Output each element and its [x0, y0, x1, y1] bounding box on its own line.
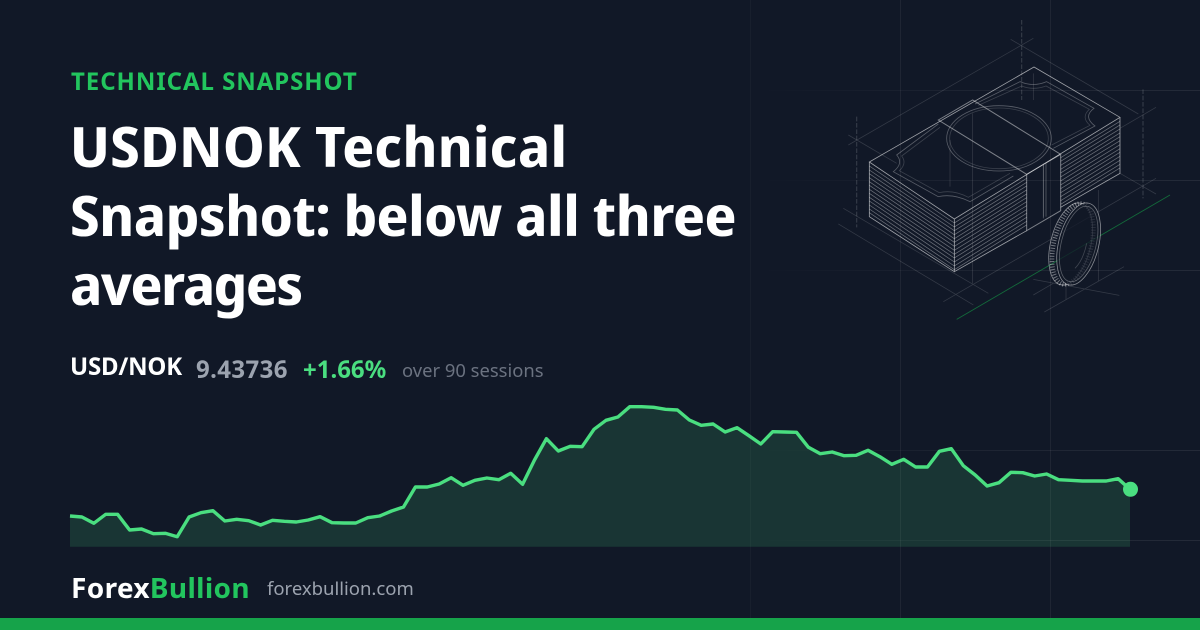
eyebrow label: TECHNICAL SNAPSHOT	[71, 65, 358, 98]
brand logo: ForexBullion	[71, 569, 250, 607]
period note: over 90 sessions	[402, 358, 544, 383]
price: 9.43736	[196, 353, 288, 386]
chart line	[70, 407, 1130, 537]
site url: forexbullion.com	[267, 576, 414, 601]
title: USDNOK Technical	[70, 108, 567, 184]
title	[70, 108, 736, 322]
latest value marker	[1123, 482, 1138, 497]
bottom accent bar	[0, 618, 1200, 630]
title: Snapshot: below all three	[70, 177, 736, 253]
percent change: +1.66%	[303, 353, 386, 386]
pair name: USD/NOK	[70, 350, 182, 383]
price row	[70, 350, 544, 386]
chart area fill	[70, 407, 1130, 547]
coin	[1041, 198, 1108, 290]
title: averages	[70, 246, 302, 322]
